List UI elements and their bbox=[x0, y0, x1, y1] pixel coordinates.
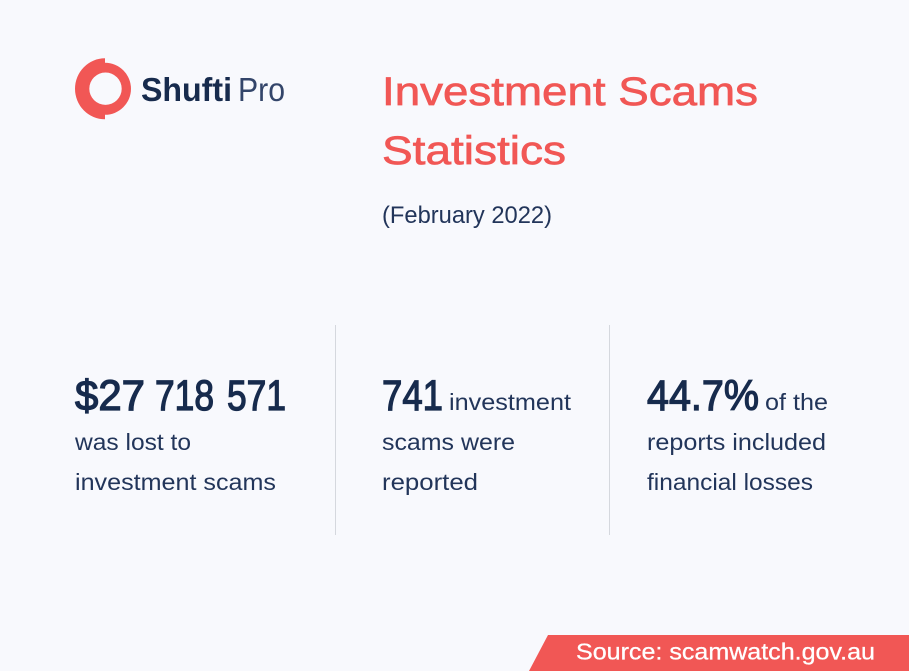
stat: amount lost: investment scams bbox=[75, 469, 276, 495]
source banner: Source: scamwatch.gov.au bbox=[576, 638, 875, 664]
stat: financial losses: financial losses bbox=[647, 469, 813, 495]
logo wordmark bbox=[141, 71, 285, 108]
stat: scams reported: 741 bbox=[382, 372, 443, 420]
stat: amount lost bbox=[74, 372, 286, 495]
logo wordmark: Pro bbox=[238, 71, 285, 108]
date subtitle: (February 2022) bbox=[382, 202, 552, 229]
title line 2: Statistics bbox=[382, 129, 566, 173]
stat: scams reported bbox=[382, 372, 572, 495]
icon: logo ring bbox=[75, 58, 131, 119]
stat: amount lost: was lost to bbox=[74, 429, 191, 455]
stat: amount lost: $27 bbox=[75, 372, 145, 420]
stat: scams reported: reported bbox=[382, 469, 478, 495]
stat: scams reported: scams were bbox=[382, 429, 515, 455]
title: Investment Scams bbox=[382, 70, 758, 114]
stat: scams reported: investment bbox=[449, 389, 572, 415]
stat: amount lost: 718 bbox=[155, 372, 214, 420]
logo wordmark: Shufti bbox=[141, 71, 232, 108]
stat: financial losses: reports included bbox=[647, 429, 826, 455]
source banner bbox=[529, 635, 909, 671]
stat: financial losses bbox=[647, 372, 828, 495]
stat: financial losses: of the bbox=[765, 389, 828, 415]
stat: amount lost: 571 bbox=[227, 372, 286, 420]
logo: Shufti Pro bbox=[75, 58, 285, 119]
stat: financial losses: 44.7% bbox=[647, 372, 759, 420]
